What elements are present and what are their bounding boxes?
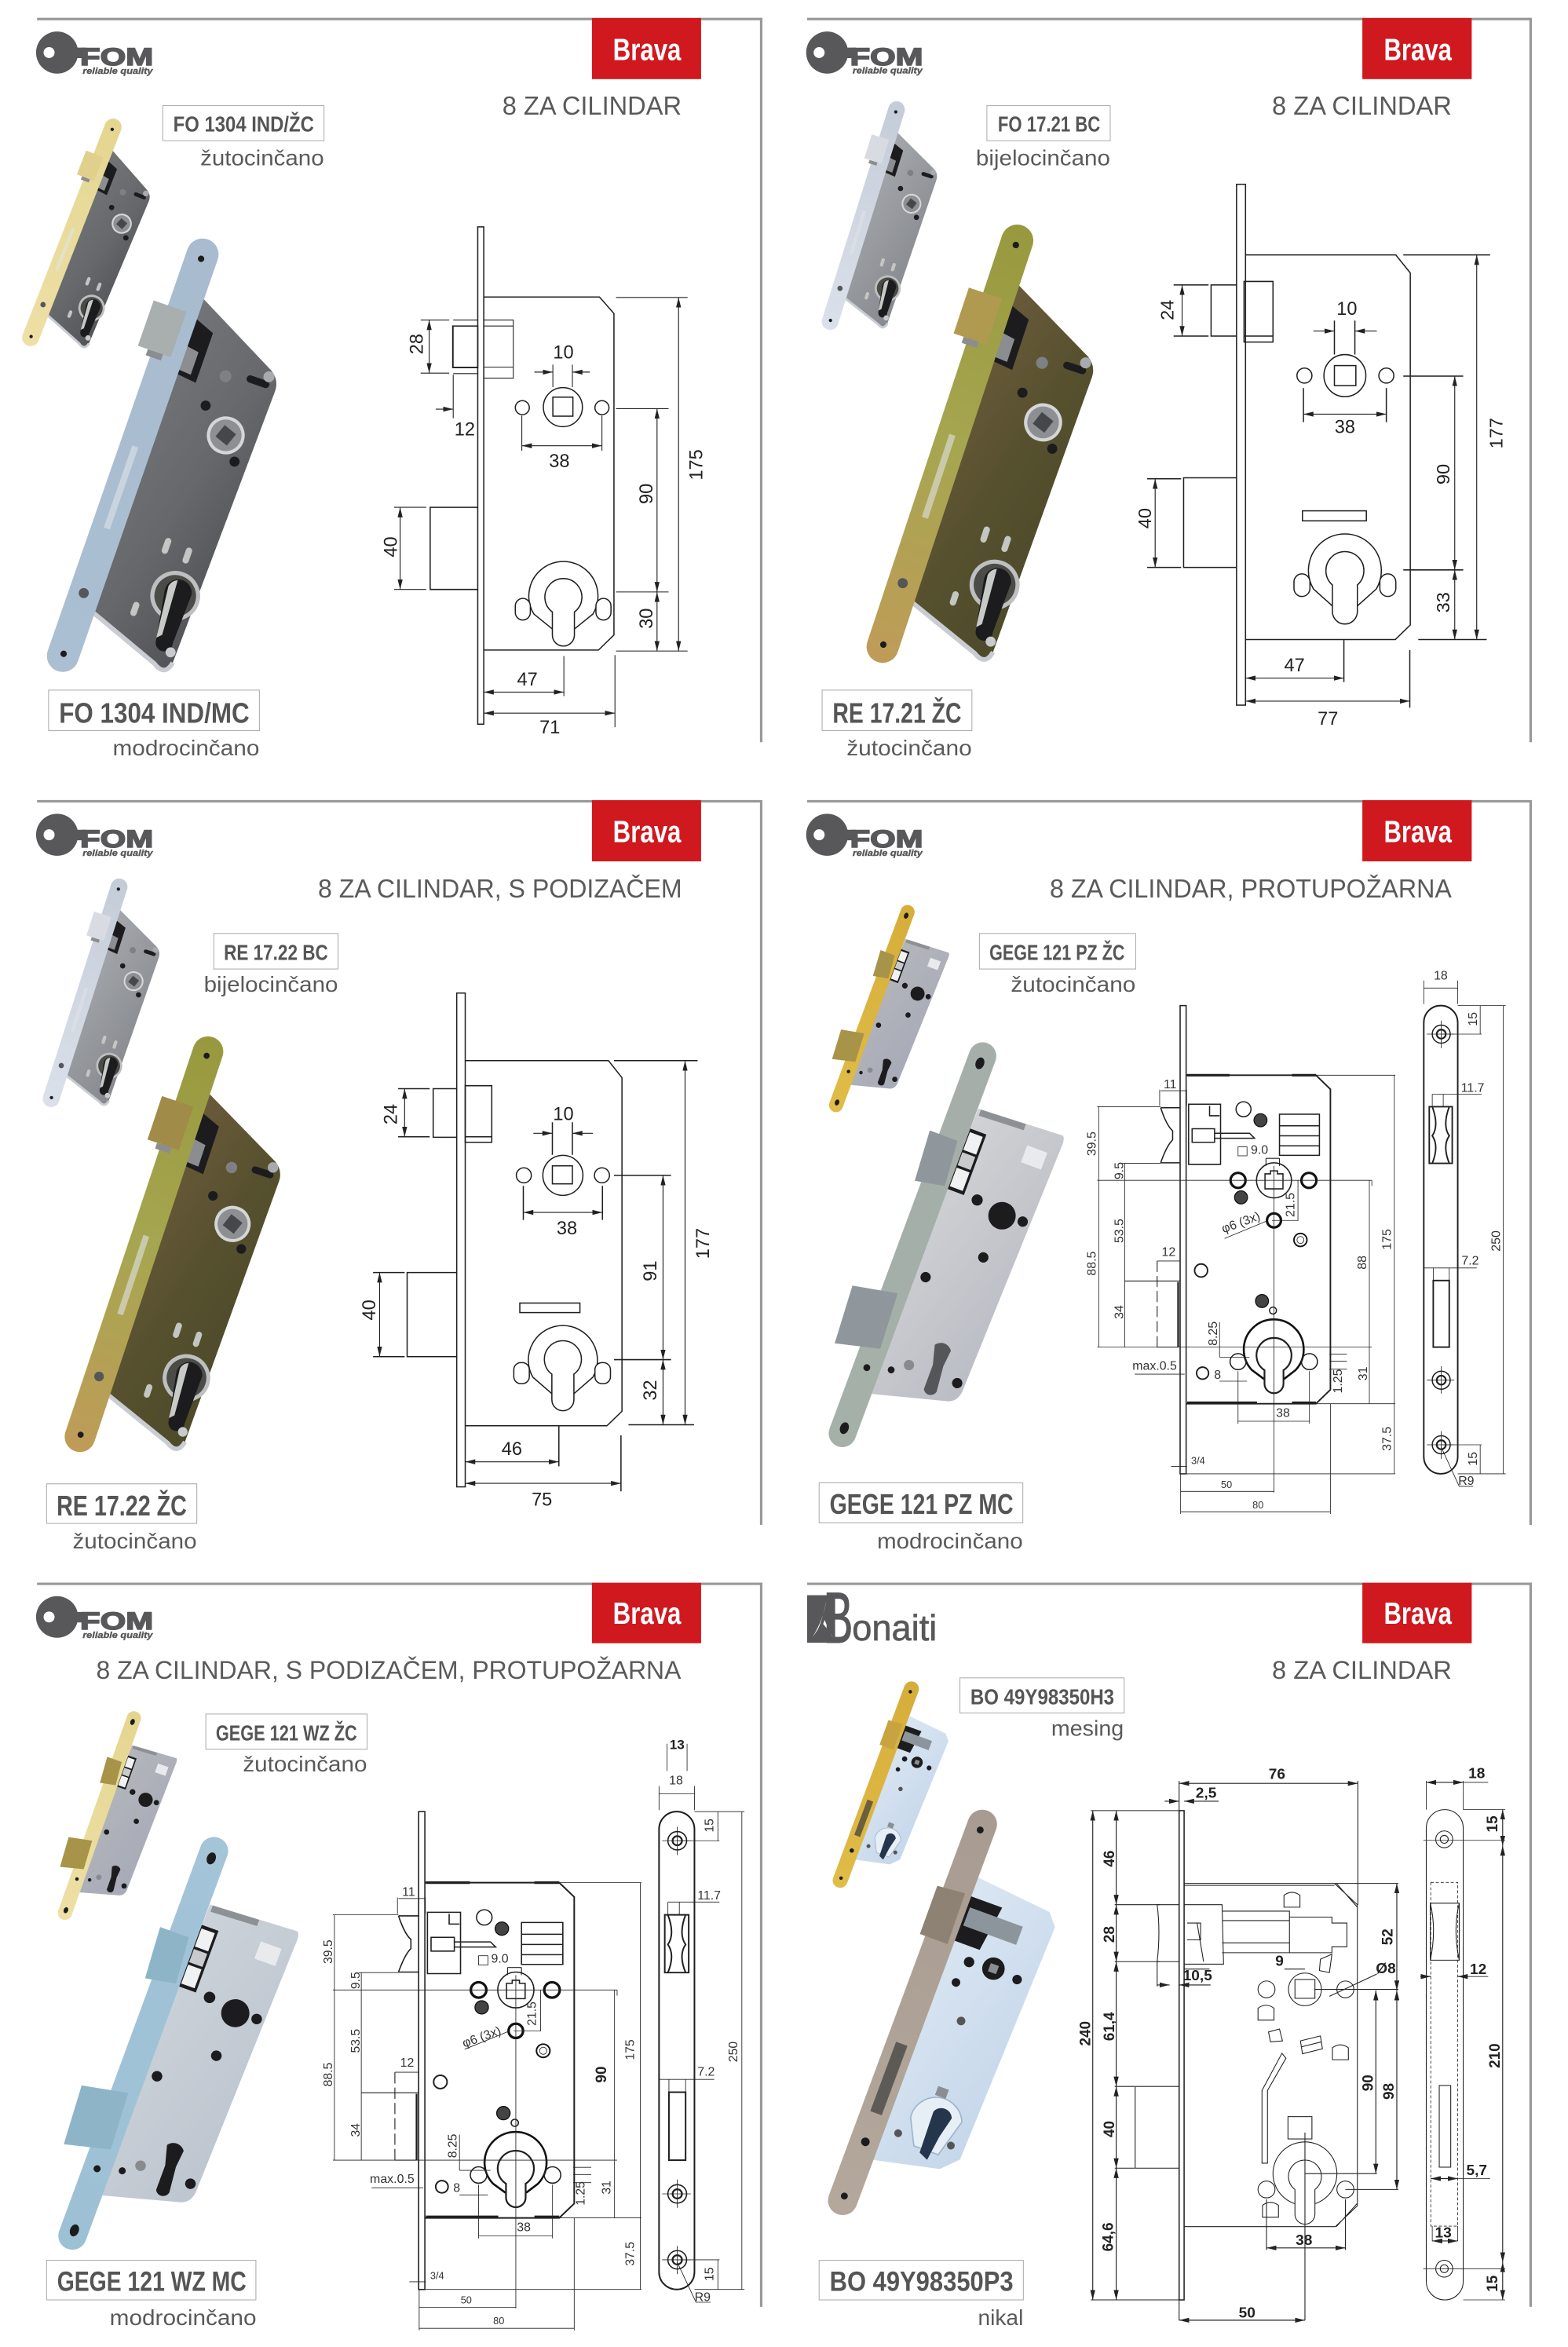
logo: FOM: reliable quality [82,1631,153,1640]
finish: žutocinčano: žutocinčano [846,736,972,760]
technical drawing: 177 [693,1228,713,1259]
technical drawing: lock case: 88 [1356,1256,1369,1270]
code label: GEGE 121 WZ MC [46,2261,256,2300]
technical drawing: lock case [322,1811,641,2331]
finish: žutocinčano: žutocinčano [72,1529,197,1553]
technical drawing: lock case: 11 [1164,1078,1177,1091]
technical drawing: 10 [553,1103,574,1124]
lock photo: large yellow zinc [47,1028,316,1486]
code label: FO 17.21 BC [987,106,1110,141]
technical drawing: lock case: 88.5 [1086,1251,1099,1276]
technical drawing: strike plate: 15 [1467,1012,1480,1026]
technical drawing: lock case: φ6 (3x) [461,2024,503,2050]
technical drawing: 38 [1335,416,1355,437]
badge: Brava [1362,1583,1471,1643]
technical drawing: 40 [359,1300,379,1321]
technical drawing: lock case: 9.5 [349,1972,363,1989]
technical drawing: lock case: 88.5 [322,2063,335,2086]
lock photo: small white zinc [33,874,178,1125]
technical drawing: strike plate: 210 [1487,2043,1504,2068]
technical drawing: lock case: 98 [1381,2083,1398,2100]
technical drawing: 33 [1433,592,1453,612]
logo: FOM [806,31,923,76]
technical drawing: 77 [1318,708,1338,729]
technical drawing: strike plate: 7.2 [1461,1254,1479,1267]
technical drawing: lock case: 8.25 [1207,1322,1220,1346]
logo: FOM: reliable quality [82,849,153,858]
finish: modrocinčano: modrocinčano [877,1529,1023,1553]
finish: modrocinčano: modrocinčano [110,2305,257,2330]
technical drawing: strike plate [1420,1766,1505,2300]
technical drawing: lock case: 9 [1275,1954,1284,1970]
logo: FOM: reliable quality [853,67,923,76]
technical drawing: lock case: 80 [493,2316,504,2327]
technical drawing: lock case: 28 [1102,1926,1118,1943]
badge: Brava [592,800,701,861]
logo: FOM: reliable quality [853,849,923,858]
code label: RE 17.21 ŽC [822,690,972,731]
technical drawing [380,227,707,737]
code label: BO 49Y98350P3: BO 49Y98350P3 [830,2266,1014,2298]
technical drawing: lock case: 53.5 [1113,1219,1127,1243]
technical drawing: 24 [1157,300,1177,320]
technical drawing: 40 [1135,508,1155,528]
badge: Brava: Brava [613,1597,682,1631]
logo: FOM [36,813,153,858]
technical drawing: lock case [1086,1006,1395,1514]
technical drawing: 90 [636,484,656,504]
technical drawing: lock case: 31 [1357,1366,1370,1380]
logo: FOM: FOM [850,824,923,853]
title: 8 ZA CILINDAR [1272,1655,1452,1684]
technical drawing: strike plate: 7.2 [697,2065,715,2078]
logo: Bonaiti [807,1578,937,1658]
technical drawing: lock case: 34 [1113,1305,1127,1319]
technical drawing: lock case: 37.5 [1380,1427,1394,1451]
finish: žutocinčano: žutocinčano [200,145,324,170]
logo: FOM [36,1596,153,1640]
technical drawing: 47 [1285,655,1305,675]
technical drawing: lock case: 2,5 [1196,1785,1217,1801]
technical drawing: lock case: 80 [1252,1499,1263,1511]
technical drawing: lock case: 37.5 [623,2242,638,2266]
technical drawing: lock case: 76 [1269,1766,1285,1782]
technical drawing: lock case: 90 [594,2067,610,2083]
finish: bijelocinčano: bijelocinčano [976,145,1110,170]
panel: GEGE 121 PZ lock [799,800,1530,1553]
logo: FOM: FOM [80,42,153,71]
technical drawing: lock case: 31 [600,2181,614,2195]
badge: Brava [592,1583,701,1643]
lock photo: large blue zinc [28,229,315,708]
technical drawing: lock case: 9.5 [1113,1162,1127,1179]
title: 8 ZA CILINDAR [1272,92,1452,121]
code label: FO 1304 IND/ŽC: FO 1304 IND/ŽC [174,112,314,137]
panel: 17.21 lock [806,18,1530,760]
technical drawing: lock case: 39.5 [1086,1131,1099,1156]
code label: BO 49Y98350H3: BO 49Y98350H3 [970,1684,1114,1709]
code label: GEGE 121 PZ ŽC [979,934,1135,969]
technical drawing: lock case: 39.5 [322,1939,335,1964]
technical drawing: lock case: 9.0 [491,1953,509,1966]
technical drawing: 46 [502,1439,522,1459]
panel: FO 1304 lock [12,18,761,760]
code label: GEGE 121 WZ MC: GEGE 121 WZ MC [57,2266,247,2298]
technical drawing: strike plate: 18 [1468,1766,1485,1782]
code label: FO 17.21 BC: FO 17.21 BC [998,112,1100,137]
technical drawing: 177 [1486,418,1507,448]
logo: FOM [36,31,153,76]
technical drawing: lock case: 38 [1276,1406,1290,1420]
technical drawing: lock case: 61,4 [1102,2012,1118,2041]
technical drawing: strike plate: 11.7 [697,1889,721,1903]
technical drawing: lock case: 8.25 [447,2133,460,2158]
logo: FOM [806,813,923,858]
technical drawing: 91 [640,1261,660,1281]
logo: FOM: FOM [80,824,153,853]
technical drawing: lock case: max.0.5 [1132,1359,1177,1373]
technical drawing: lock case: 3/4 [1191,1454,1205,1466]
technical drawing: lock case: 8 [453,2182,460,2195]
code label: RE 17.22 ŽC [46,1484,197,1523]
technical drawing: 75 [532,1490,552,1510]
code label: GEGE 121 PZ ŽC: GEGE 121 PZ ŽC [989,941,1124,965]
code label: FO 1304 IND/MC [49,690,259,731]
technical drawing: lock case: 12 [1162,1246,1175,1259]
technical drawing: lock case: 52 [1380,1928,1397,1945]
code label: RE 17.21 ŽC: RE 17.21 ŽC [832,697,961,729]
panel: Bonaiti lock [807,1578,1530,2330]
technical drawing: lock case: φ6 (3x) [1220,1210,1262,1236]
technical drawing: 28 [407,334,427,354]
technical drawing: lock case: 50 [1221,1479,1232,1490]
technical drawing: strike plate: 15 [1485,2275,1501,2292]
technical drawing: strike plate: 15 [703,2267,716,2281]
technical drawing: lock case: 175 [623,2039,638,2060]
logo: FOM: FOM [80,1607,153,1635]
technical drawing: strike plate: 250 [727,2042,740,2062]
lock photo: small white zinc [812,97,956,347]
lock photo: large blue zinc [27,1823,321,2286]
badge: Brava [592,18,701,79]
technical drawing: strike plate: 12 [1470,1961,1486,1978]
code label: BO 49Y98350H3 [960,1678,1124,1713]
finish: mesing: mesing [1051,1716,1124,1741]
technical drawing: lock case: 240 [1077,2021,1094,2045]
logo: FOM: reliable quality [82,67,153,76]
technical drawing: 32 [640,1380,660,1401]
badge: Brava: Brava [1383,1597,1452,1631]
code label: RE 17.22 BC [214,934,338,969]
technical drawing: 71 [539,717,560,737]
lock photo: small yellow zinc [42,1705,188,1937]
technical drawing: lock case [1077,1766,1398,2322]
technical drawing [1135,185,1507,729]
technical drawing: 90 [1433,464,1453,484]
technical drawing: strike plate: 11.7 [1461,1081,1485,1095]
title: 8 ZA CILINDAR, S PODIZAČEM [318,874,682,904]
technical drawing: 10 [553,342,574,362]
technical drawing: lock case: 46 [1102,1851,1118,1867]
technical drawing: lock case: 38 [517,2221,531,2234]
technical drawing: lock case: 1.25 [1332,1369,1345,1393]
title: 8 ZA CILINDAR, S PODIZAČEM, PROTUPOŽARNA [96,1655,681,1684]
technical drawing: lock case: 34 [349,2123,363,2137]
technical drawing [359,993,713,1510]
logo: Bonaiti: onaiti [852,1607,937,1648]
panel: 17.22 lock [33,800,761,1553]
lock photo: large nickel [818,1804,1085,2250]
finish: nikal: nikal [978,2305,1023,2330]
lock photo: large blue zinc [799,1029,1087,1483]
technical drawing: lock case: max.0.5 [370,2173,415,2186]
lock photo: small brass [828,1678,963,1906]
title: 8 ZA CILINDAR [503,92,682,121]
technical drawing: strike plate: 18 [669,1775,683,1787]
technical drawing: 38 [557,1218,577,1238]
technical drawing: lock case: 1.25 [574,2181,587,2206]
technical drawing: 175 [686,449,707,481]
title: 8 ZA CILINDAR, PROTUPOŽARNA [1050,874,1453,904]
technical drawing: strike plate: 5,7 [1466,2162,1487,2179]
technical drawing: 40 [380,536,400,558]
code label: GEGE 121 PZ MC [819,1482,1023,1523]
technical drawing: lock case: 21.5 [525,2002,539,2026]
logo: Bonaiti: B [823,1578,853,1658]
technical drawing: lock case: 3/4 [430,2271,444,2282]
technical drawing: 47 [517,669,538,689]
badge: Brava [1362,800,1471,861]
lock photo: large yellow zinc [848,215,1131,698]
code label: RE 17.22 ŽC: RE 17.22 ŽC [57,1490,187,1522]
code label: GEGE 121 WZ ŽC: GEGE 121 WZ ŽC [216,1720,357,1745]
technical drawing: lock case: Ø8 [1376,1961,1396,1977]
technical drawing: strike plate [1424,969,1506,1488]
logo: FOM: FOM [850,42,923,71]
technical drawing: strike plate: 15 [703,1819,716,1833]
technical drawing: lock case: 50 [1239,2305,1255,2322]
technical drawing: strike plate: 250 [1490,1230,1504,1252]
technical drawing: 12 [455,419,475,440]
technical drawing: lock case: 12 [400,2056,415,2070]
technical drawing: strike plate: 13 [1435,2225,1452,2241]
technical drawing: lock case: 21.5 [1285,1193,1298,1217]
code label: FO 1304 IND/ŽC [163,106,324,141]
technical drawing: lock case: 10,5 [1183,1968,1212,1984]
lock photo: small yellow zinc [12,113,173,367]
technical drawing: strike plate: 13 [670,1738,685,1752]
lock photo: small yellow zinc [813,898,961,1131]
technical drawing: lock case: 8 [1214,1369,1221,1382]
technical drawing: lock case: 50 [461,2295,472,2306]
code label: RE 17.22 BC: RE 17.22 BC [224,941,328,965]
code label: GEGE 121 WZ ŽC [206,1714,367,1749]
badge: Brava: Brava [1383,816,1452,850]
technical drawing: lock case: 40 [1102,2121,1118,2137]
badge: Brava: Brava [1383,33,1452,68]
finish: žutocinčano: žutocinčano [243,1752,367,1776]
finish: žutocinčano: žutocinčano [1011,972,1135,996]
technical drawing: strike plate: 18 [1434,969,1448,983]
code label: GEGE 121 PZ MC: GEGE 121 PZ MC [830,1489,1014,1520]
technical drawing: lock case: 64,6 [1101,2223,1117,2251]
technical drawing: strike plate: R9 [695,2290,711,2304]
badge: Brava: Brava [613,816,682,850]
badge: Brava: Brava [613,34,682,68]
panel: GEGE 121 WZ lock [27,1583,761,2331]
technical drawing: lock case: 175 [1380,1229,1394,1250]
technical drawing: lock case: 9.0 [1251,1143,1268,1157]
technical drawing: 38 [549,451,570,471]
technical drawing: lock case: 90 [1360,2075,1376,2091]
technical drawing: lock case: 38 [1296,2232,1312,2249]
code label: FO 1304 IND/MC: FO 1304 IND/MC [59,697,250,729]
badge: Brava [1362,18,1471,79]
technical drawing: lock case: 53.5 [349,2029,363,2053]
technical drawing: strike plate: R9 [1458,1475,1475,1488]
technical drawing: strike plate: 15 [1467,1452,1480,1466]
finish: modrocinčano: modrocinčano [113,736,259,760]
technical drawing: strike plate: 15 [1485,1815,1501,1832]
technical drawing: strike plate [659,1738,744,2304]
technical drawing: 10 [1336,298,1357,319]
technical drawing: 30 [636,609,656,629]
technical drawing: 24 [380,1104,400,1124]
finish: bijelocinčano: bijelocinčano [204,972,338,996]
technical drawing: lock case: 11 [402,1886,415,1899]
